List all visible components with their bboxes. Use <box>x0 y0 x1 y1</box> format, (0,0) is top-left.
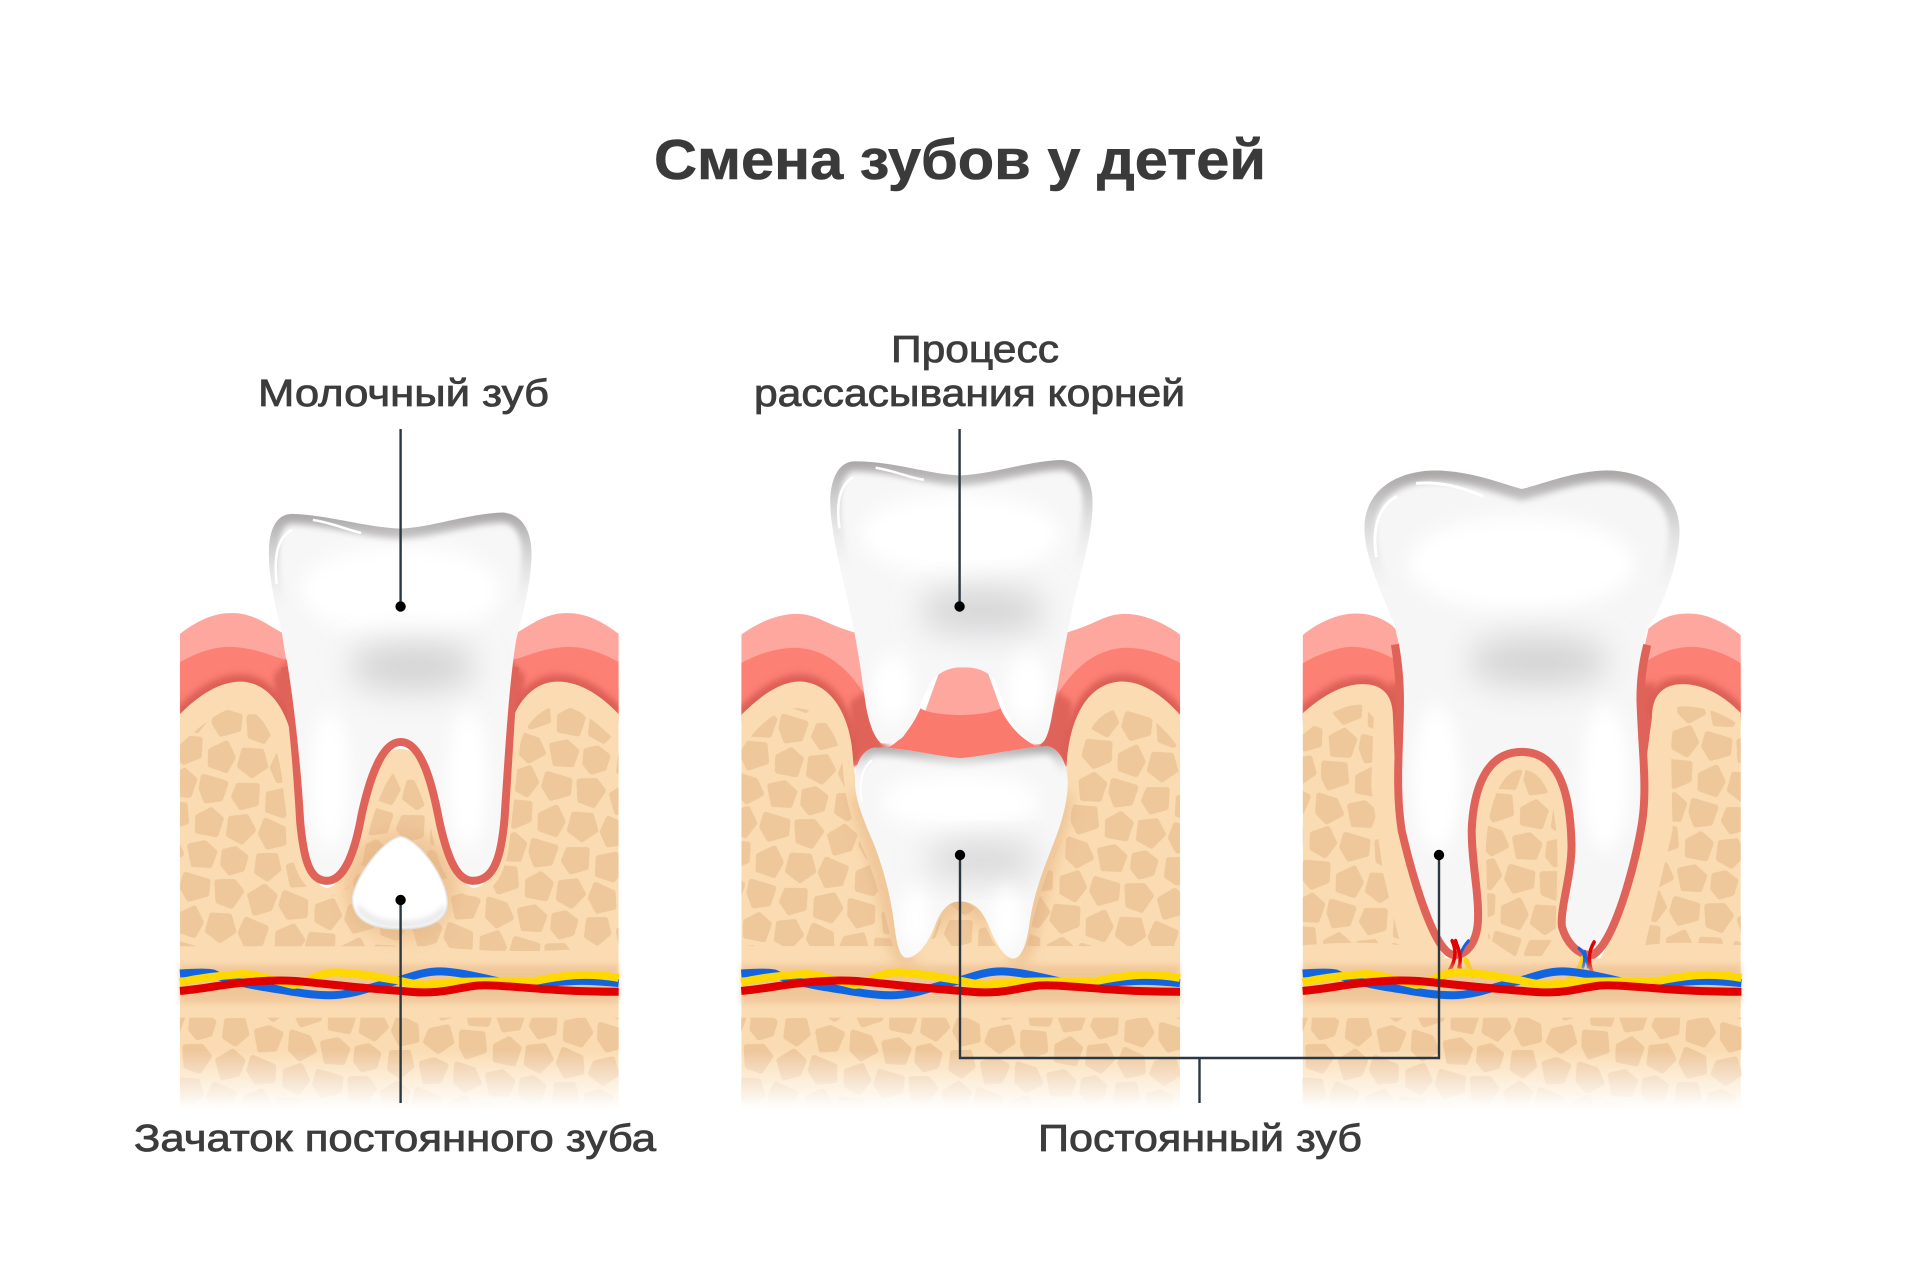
permanent tooth <box>1361 466 1683 956</box>
leader: resorbing root <box>954 429 965 612</box>
label: permanent tooth: Постоянный зуб <box>1038 1118 1362 1160</box>
leader: baby tooth <box>395 429 406 612</box>
baby tooth <box>265 506 537 883</box>
leader: permanent tooth connector <box>955 850 1444 1103</box>
panel: baby tooth with permanent tooth bud <box>180 506 619 1109</box>
permanent tooth erupting <box>852 743 1072 962</box>
new tooth shadow <box>857 793 1066 958</box>
panel: root resorption process <box>741 455 1180 1110</box>
bud shadow <box>344 831 458 940</box>
permanent tooth bud <box>352 837 447 929</box>
label: root resorption <box>754 329 1185 415</box>
gums <box>180 613 619 723</box>
nerves entering root tips <box>1442 941 1597 982</box>
bone pores <box>180 706 619 951</box>
label: root resorption: рассасывания корней <box>754 373 1185 415</box>
band: nerves and lower bone, panel 1 <box>180 965 619 1109</box>
band: nerves and lower bone, panel 3 <box>1303 965 1741 1109</box>
label: root resorption: Процесс <box>891 329 1059 371</box>
root socket <box>1399 644 1643 951</box>
leader: tooth bud <box>395 895 406 1103</box>
resorbing baby tooth <box>827 455 1096 750</box>
infographic: tooth replacement in children <box>134 136 1744 1160</box>
bone pores <box>741 708 893 946</box>
label: permanent tooth bud: Зачаток постоянного зуба <box>134 1118 657 1160</box>
jaw bone <box>741 682 1180 1110</box>
panel: fully erupted permanent tooth <box>1303 466 1741 1110</box>
jaw bone <box>180 682 619 1109</box>
bone pores <box>1303 705 1401 945</box>
root socket <box>289 666 511 877</box>
gums <box>1303 613 1741 865</box>
title: Смена зубов у детей <box>654 128 1266 192</box>
label: baby tooth: Молочный зуб <box>258 373 549 415</box>
jaw bone <box>1303 684 1741 1110</box>
bottom fade <box>170 1050 1750 1116</box>
band: nerves and lower bone, panel 2 <box>741 965 1180 1109</box>
gums <box>741 614 1180 767</box>
